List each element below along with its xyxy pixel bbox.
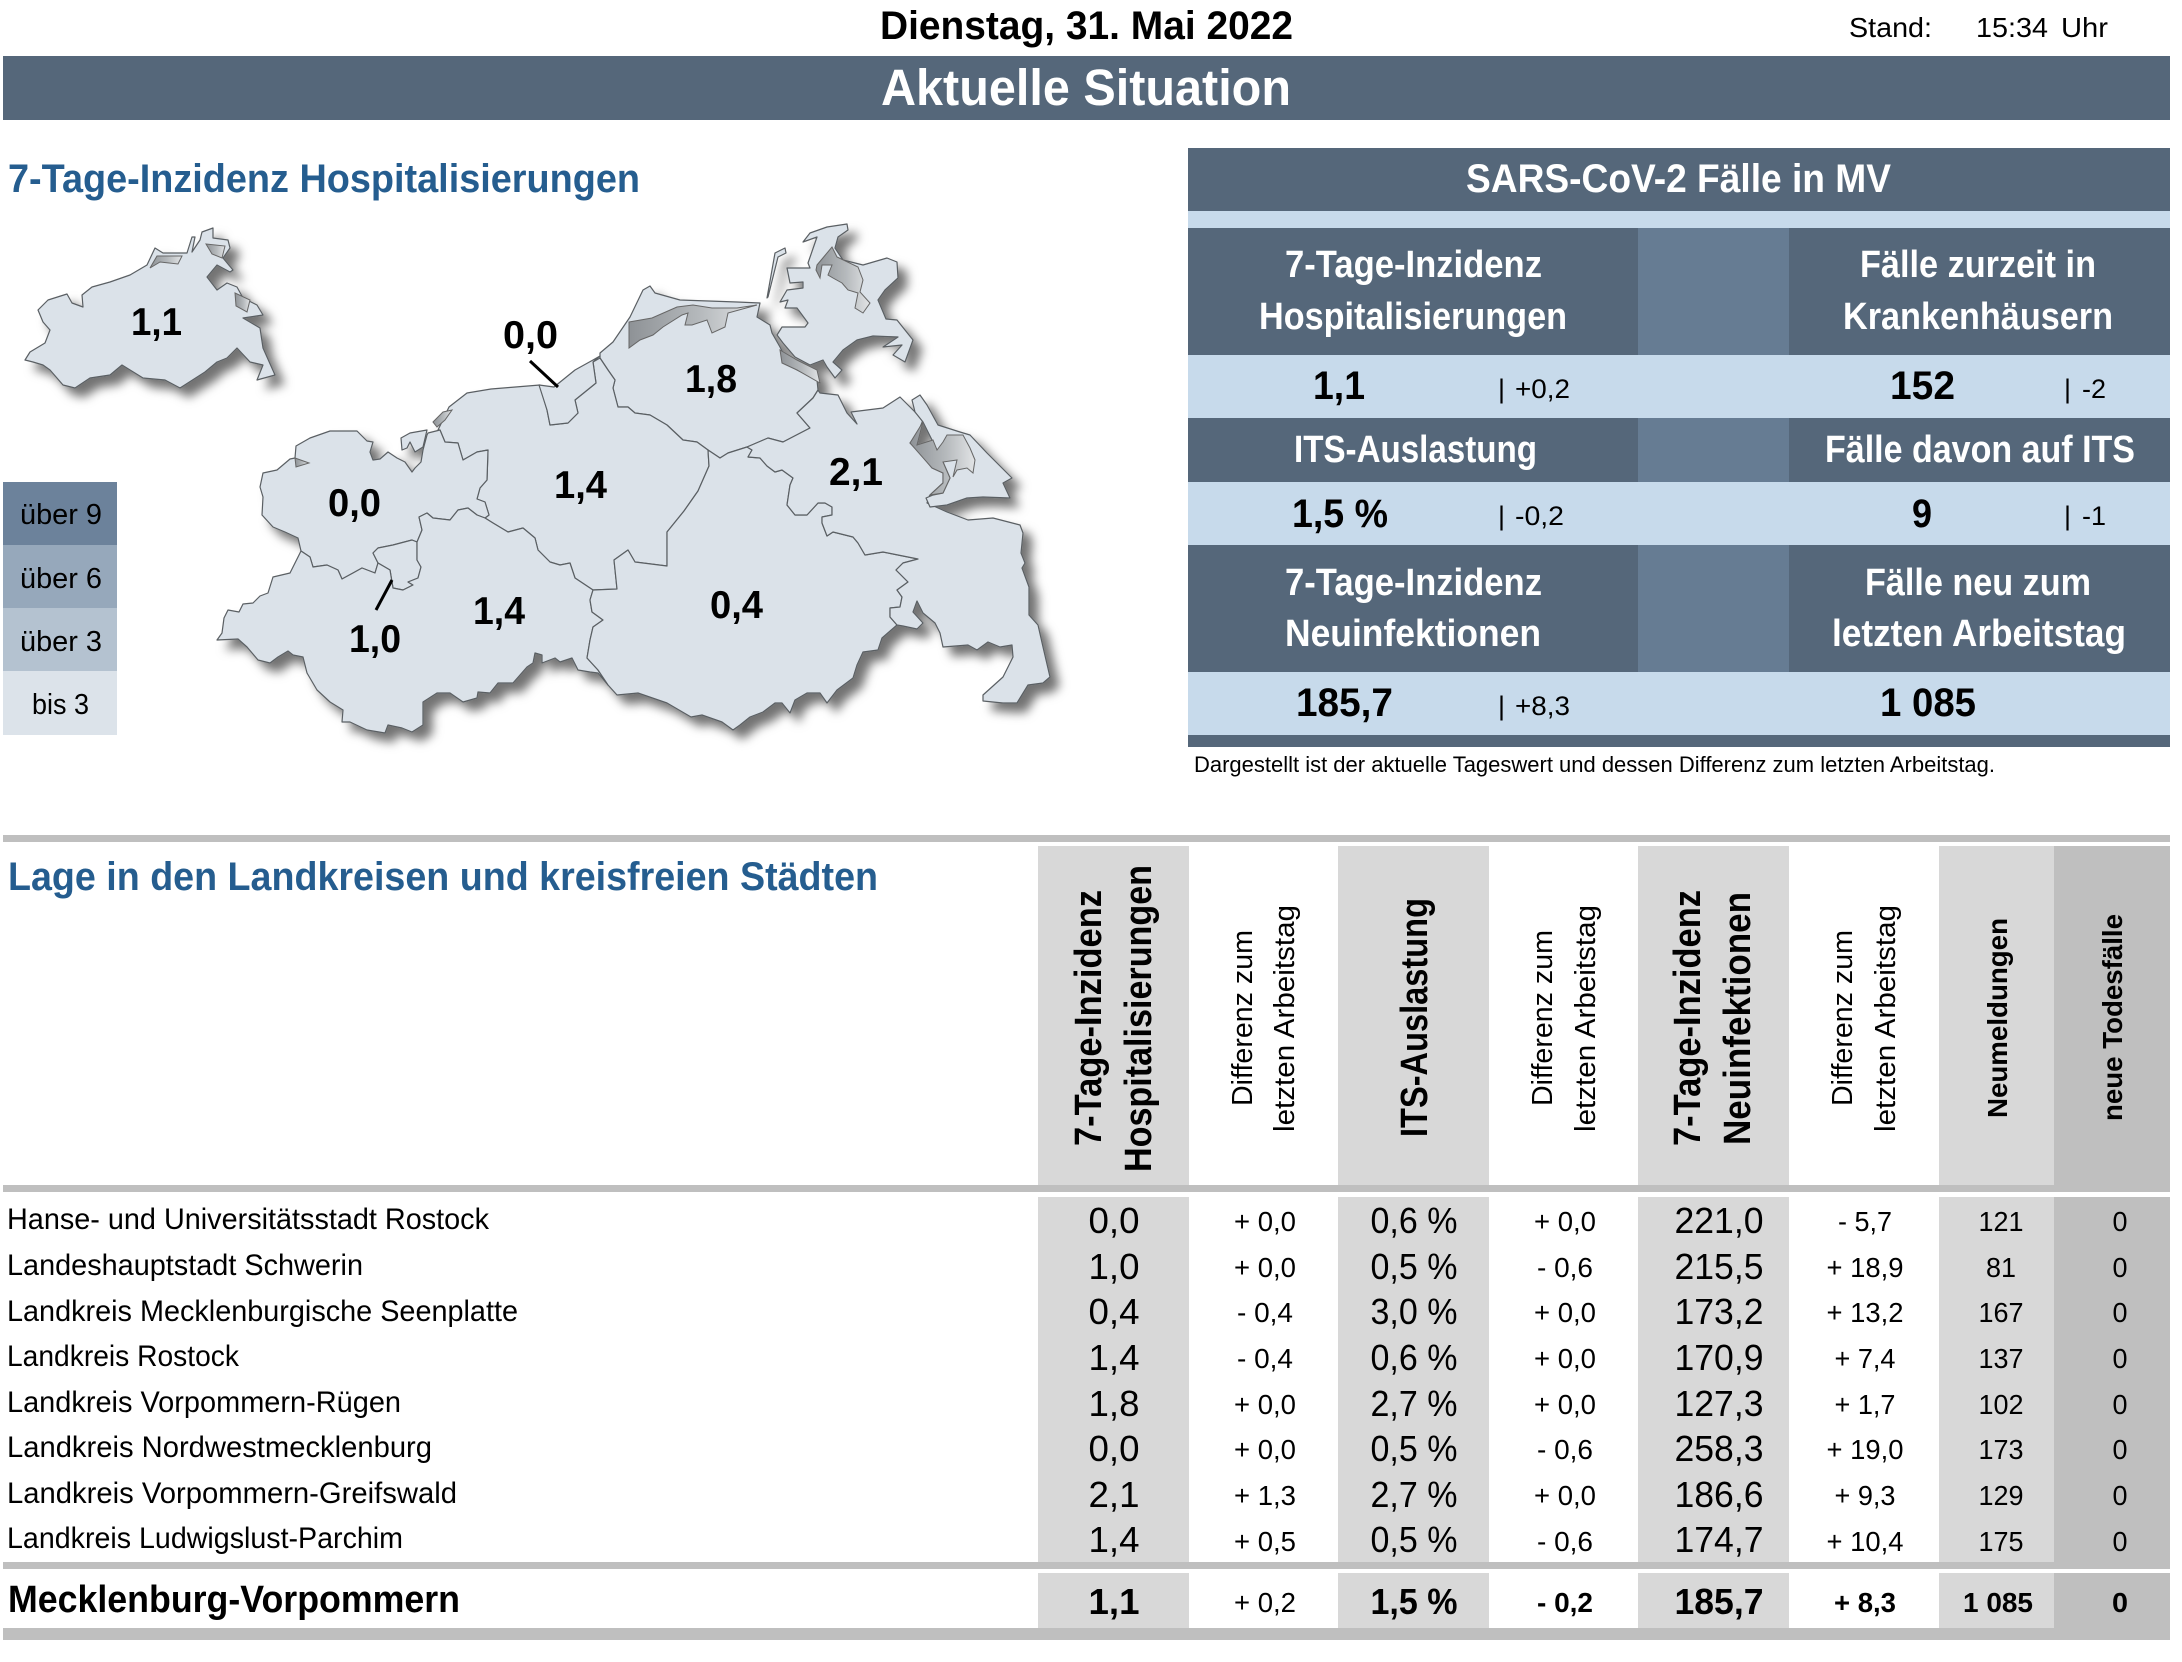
timestamp: Stand:: [1849, 12, 1932, 43]
legend: über 6: [20, 563, 102, 595]
column: new deaths: 0: [2112, 1297, 2128, 1328]
column headers: [1068, 865, 2128, 1172]
column: ICU difference: + 0,0: [1534, 1206, 1596, 1237]
row names: Landkreis Ludwigslust-Parchim: [7, 1522, 403, 1555]
column: new deaths: 0: [2112, 1252, 2128, 1283]
district: Mecklenburgische Seenplatte: [587, 447, 918, 730]
column: new infection incidence values: 258,3: [1674, 1428, 1764, 1469]
value: hospitalisation incidence: 1,1: [1313, 364, 1365, 408]
value: ICU cases: -1: [2082, 501, 2106, 531]
column: new infection difference: + 1,7: [1834, 1389, 1896, 1420]
column: ICU load values: [1370, 1200, 1458, 1622]
column: ICU difference: + 0,0: [1534, 1343, 1596, 1374]
column: new reports: 1 085: [1963, 1587, 2033, 1618]
value: hospitalisation incidence: +0,2: [1515, 374, 1570, 404]
district: Wismar bay lake: [295, 458, 309, 467]
map values: 1,1: [131, 301, 182, 344]
district: Hiddensee: [767, 248, 786, 298]
value: ICU cases: [1912, 492, 2106, 536]
district: Rügen lagoon: [816, 247, 870, 313]
column: new infection incidence values: [1674, 1200, 1764, 1622]
column: ICU difference: - 0,6: [1537, 1526, 1593, 1557]
label: new cases: Fälle neu zum: [1865, 562, 2091, 604]
column: new deaths: 0: [2112, 1206, 2128, 1237]
row names: Hanse- und Universitätsstadt Rostock: [7, 1203, 490, 1236]
column: hospitalisation difference: + 0,0: [1234, 1389, 1296, 1420]
legend: [3, 482, 117, 735]
label: hospital cases: [1843, 244, 2113, 338]
district: Rostock city: [539, 356, 600, 425]
title banner: Aktuelle Situation: [881, 59, 1291, 116]
column: ICU load values: 3,0 %: [1370, 1291, 1458, 1332]
column: new infection incidence values: 174,7: [1674, 1519, 1764, 1560]
label: new cases: letzten Arbeitstag: [1832, 613, 2126, 655]
map leader line: Schwerin: [376, 580, 392, 610]
column: hospitalisation difference: + 0,0: [1234, 1252, 1296, 1283]
column: new reports: 121: [1978, 1206, 2024, 1237]
column: hospitalisation difference: - 0,4: [1237, 1343, 1293, 1374]
column: hospitalisation incidence values: 1,8: [1088, 1383, 1140, 1424]
district: Salzhaff peninsula: [433, 410, 452, 427]
value: ICU load: [1292, 492, 1564, 536]
table heading: Lage in den Landkreisen und kreisfreien Städten: [8, 855, 878, 899]
column: new infection difference: + 7,4: [1834, 1343, 1896, 1374]
column headers: letzten Arbeitstag: [1269, 905, 1301, 1132]
legend: bis 3: [32, 689, 89, 721]
column: ICU load values: 2,7 %: [1370, 1383, 1458, 1424]
column: ICU difference: - 0,2: [1537, 1587, 1593, 1618]
value: new infection incidence: |: [1498, 691, 1505, 721]
column: hospitalisation incidence values: 1,0: [1088, 1246, 1140, 1287]
column: new infection difference: + 9,3: [1834, 1480, 1896, 1511]
column: hospitalisation difference: + 0,0: [1234, 1434, 1296, 1465]
timestamp: Uhr: [2061, 12, 2108, 43]
value: hospitalisation incidence: |: [1498, 374, 1505, 404]
column headers: Differenz zum: [1227, 930, 1259, 1106]
row names: Landeshauptstadt Schwerin: [7, 1249, 363, 1282]
column: hospitalisation difference: + 0,5: [1234, 1526, 1296, 1557]
map values: 0,0: [328, 482, 381, 525]
column headers: Neumeldungen: [1982, 918, 2013, 1118]
column: hospitalisation difference: + 0,0: [1234, 1206, 1296, 1237]
column: hospitalisation difference: - 0,4: [1237, 1297, 1293, 1328]
value: ICU load: -0,2: [1515, 501, 1564, 531]
value: new cases: 1 085: [1880, 681, 1976, 725]
column: hospitalisation difference: + 1,3: [1234, 1480, 1296, 1511]
value: hospital cases: [1890, 364, 2106, 408]
label: new infection incidence: Neuinfektionen: [1285, 613, 1541, 655]
column: ICU load values: 0,6 %: [1370, 1200, 1458, 1241]
column: ICU load values: 0,5 %: [1370, 1428, 1458, 1469]
row names: Landkreis Vorpommern-Rügen: [7, 1386, 401, 1419]
column: new deaths: 0: [2112, 1480, 2128, 1511]
column headers: 7-Tage-Inzidenz: [1068, 890, 1110, 1146]
label: ICU cases: Fälle davon auf ITS: [1825, 429, 2135, 471]
column: new reports: [1963, 1206, 2033, 1618]
label: hospitalisation incidence: Hospitalisierungen: [1259, 296, 1567, 338]
column: hospitalisation incidence values: 1,4: [1088, 1519, 1140, 1560]
column: hospitalisation difference: + 0,2: [1234, 1587, 1296, 1618]
column headers: Hospitalisierungen: [1118, 865, 1160, 1172]
column: ICU difference: + 0,0: [1534, 1297, 1596, 1328]
district: Vorpommern-Greifswald: [747, 390, 1050, 703]
map values: 1,4: [554, 464, 607, 507]
map values: [131, 301, 883, 661]
column headers: Differenz zum: [1827, 930, 1859, 1106]
district: Poel island: [401, 430, 427, 452]
value: new infection incidence: 185,7: [1296, 681, 1393, 725]
timestamp: 15:34: [1976, 12, 2048, 43]
title banner: [3, 56, 2170, 120]
column: hospitalisation incidence values: 0,0: [1088, 1200, 1140, 1241]
column: new reports: 167: [1978, 1297, 2024, 1328]
map values: 0,4: [710, 584, 763, 627]
label: hospitalisation incidence: [1259, 244, 1567, 338]
column: new infection incidence values: 215,5: [1674, 1246, 1764, 1287]
map heading: 7-Tage-Inzidenz Hospitalisierungen: [8, 157, 640, 201]
district: Landkreis Rostock: [438, 358, 709, 590]
row names: Landkreis Mecklenburgische Seenplatte: [7, 1295, 518, 1328]
total row name: Mecklenburg-Vorpommern: [8, 1579, 460, 1621]
column: new deaths: 0: [2112, 1343, 2128, 1374]
column: ICU load values: 0,5 %: [1370, 1246, 1458, 1287]
column: ICU load values: 0,6 %: [1370, 1337, 1458, 1378]
value: hospitalisation incidence: [1313, 364, 1570, 408]
column: new infection incidence values: 185,7: [1674, 1581, 1764, 1622]
label: new infection incidence: [1285, 562, 1542, 655]
column: hospitalisation incidence values: 0,4: [1088, 1291, 1140, 1332]
date heading: Dienstag, 31. Mai 2022: [880, 4, 1293, 48]
map values: 1,4: [473, 590, 525, 633]
value: ICU load: 1,5 %: [1292, 492, 1388, 536]
column: new reports: 81: [1986, 1252, 2016, 1283]
column: new deaths: 0: [2112, 1526, 2128, 1557]
column: new infection difference: + 10,4: [1826, 1526, 1904, 1557]
row names: Landkreis Vorpommern-Greifswald: [7, 1477, 457, 1510]
district: Strelasund: [780, 350, 820, 383]
column: hospitalisation incidence values: 2,1: [1088, 1474, 1140, 1515]
column: ICU difference: - 0,6: [1537, 1252, 1593, 1283]
district: Ludwigslust-Parchim: [217, 508, 608, 733]
value: new infection incidence: +8,3: [1515, 691, 1570, 721]
column: new deaths: 0: [2112, 1434, 2128, 1465]
legend: über 9: [20, 499, 102, 531]
column: hospitalisation difference: [1234, 1206, 1296, 1618]
column: new reports: 175: [1978, 1526, 2024, 1557]
value: new infection incidence: [1296, 681, 1570, 725]
column: new infection difference: [1826, 1206, 1904, 1618]
label: hospital cases: Krankenhäusern: [1843, 296, 2113, 338]
district: Usedom lagoon: [910, 422, 975, 495]
column: ICU difference: [1534, 1206, 1596, 1618]
value: hospital cases: 152: [1890, 364, 1955, 408]
district: Usedom: [912, 395, 1012, 507]
map: Mecklenburg-Vorpommern inset: [25, 228, 275, 388]
map values: 1,8: [685, 358, 737, 401]
map values: 0,0: [503, 314, 558, 357]
value: ICU load: |: [1498, 501, 1505, 531]
legend: über 3: [20, 626, 102, 658]
table background columns: [3, 835, 2170, 1640]
column: ICU load values: 0,5 %: [1370, 1519, 1458, 1560]
column: new infection difference: + 19,0: [1826, 1434, 1904, 1465]
column: new deaths: 0: [2112, 1389, 2128, 1420]
district: Vorpommern-Rügen mainland: [600, 286, 818, 458]
column: new reports: 129: [1978, 1480, 2024, 1511]
column: ICU load values: 2,7 %: [1370, 1474, 1458, 1515]
district: Nordwestmecklenburg: [260, 430, 489, 579]
column headers: neue Todesfälle: [2097, 914, 2128, 1121]
column: new infection difference: + 18,9: [1826, 1252, 1904, 1283]
row names: Landkreis Rostock: [7, 1340, 240, 1373]
timestamp: [1849, 12, 2108, 43]
column headers: ITS-Auslastung: [1394, 898, 1436, 1137]
column headers: letzten Arbeitstag: [1870, 905, 1902, 1132]
column headers: letzten Arbeitstag: [1570, 905, 1602, 1132]
label: ICU load: ITS-Auslastung: [1294, 429, 1537, 471]
column: new reports: 102: [1978, 1389, 2024, 1420]
column: new infection incidence values: 186,6: [1674, 1474, 1764, 1515]
column headers: Differenz zum: [1527, 930, 1559, 1106]
column: new reports: 173: [1978, 1434, 2024, 1465]
column: ICU difference: + 0,0: [1534, 1389, 1596, 1420]
column: hospitalisation incidence values: 0,0: [1088, 1428, 1140, 1469]
value: hospital cases: |: [2064, 374, 2071, 404]
column: new reports: 137: [1978, 1343, 2024, 1374]
row names: Landkreis Nordwestmecklenburg: [7, 1431, 432, 1464]
value: hospital cases: -2: [2082, 374, 2106, 404]
column: new infection difference: - 5,7: [1838, 1206, 1892, 1237]
district: Rügen island: [777, 224, 913, 378]
row names: [7, 1203, 518, 1555]
panel: SARS-CoV-2 cases: [1188, 148, 2170, 747]
map values: 1,0: [349, 618, 401, 661]
label: new cases: [1832, 562, 2126, 655]
value: ICU cases: |: [2064, 501, 2071, 531]
column: hospitalisation incidence values: [1088, 1200, 1140, 1622]
column: new infection incidence values: 170,9: [1674, 1337, 1764, 1378]
column: new infection difference: + 8,3: [1834, 1587, 1896, 1618]
column: new infection difference: + 13,2: [1826, 1297, 1904, 1328]
label: hospital cases: Fälle zurzeit in: [1860, 244, 2096, 286]
column: new deaths: 0: [2112, 1587, 2128, 1618]
column: new infection incidence values: 173,2: [1674, 1291, 1764, 1332]
column headers: 7-Tage-Inzidenz: [1667, 890, 1709, 1146]
panel footnote: Dargestellt ist der aktuelle Tageswert und dessen Differenz zum letzten Arbeitstag.: [1194, 752, 1995, 777]
column headers: Neuinfektionen: [1717, 892, 1759, 1145]
panel heading: SARS-CoV-2 Fälle in MV: [1466, 157, 1891, 201]
map: districts: [217, 224, 1050, 733]
column: ICU load values: 1,5 %: [1370, 1581, 1458, 1622]
column: new infection incidence values: 221,0: [1674, 1200, 1764, 1241]
column: new deaths: [2112, 1206, 2128, 1618]
column: hospitalisation incidence values: 1,4: [1088, 1337, 1140, 1378]
column: ICU difference: - 0,6: [1537, 1434, 1593, 1465]
map values: 2,1: [829, 451, 883, 494]
column: ICU difference: + 0,0: [1534, 1480, 1596, 1511]
value: ICU cases: 9: [1912, 492, 1932, 536]
label: hospitalisation incidence: 7-Tage-Inzidenz: [1285, 244, 1542, 286]
district: Vorpommern-Rügen lagoons: [629, 305, 757, 348]
map leader line: Rostock: [530, 361, 558, 387]
district: Schwerin: [373, 540, 421, 590]
column: new infection incidence values: 127,3: [1674, 1383, 1764, 1424]
column: hospitalisation incidence values: 1,1: [1088, 1581, 1140, 1622]
label: new infection incidence: 7-Tage-Inzidenz: [1285, 562, 1542, 604]
